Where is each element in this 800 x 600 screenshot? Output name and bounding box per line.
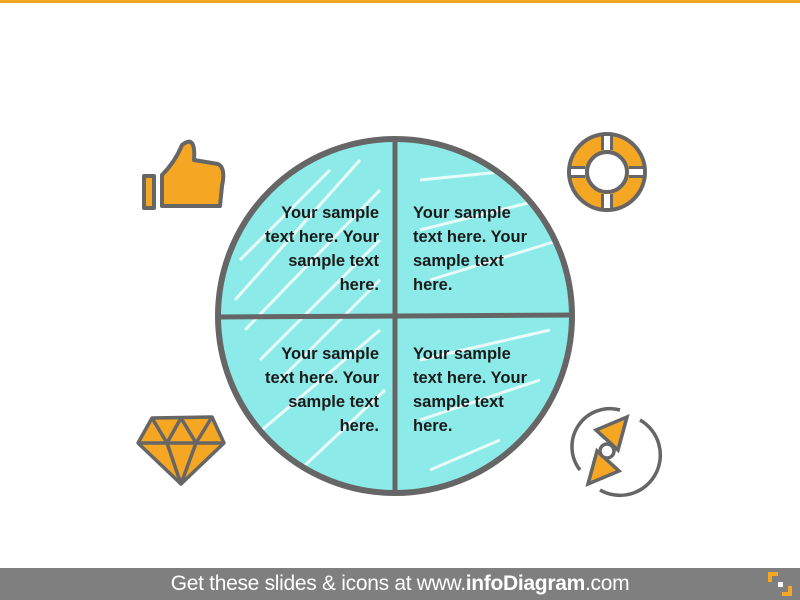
icon: diamond — [138, 417, 224, 484]
text: top-left quadrant: Your sample text here. Your sample text here. — [265, 204, 379, 294]
footer logo — [768, 572, 792, 596]
icon: compass — [572, 409, 660, 495]
quadrant circle — [216, 138, 574, 494]
icon: lifebuoy — [569, 134, 645, 210]
text: top-right quadrant: Your sample text here. Your sample text here. — [413, 204, 527, 294]
text: bottom-left quadrant: Your sample text here. Your sample text here. — [265, 345, 379, 435]
text: bottom-right quadrant: Your sample text here. Your sample text here. — [413, 345, 527, 435]
icon: thumbs up — [144, 142, 223, 208]
footer bar: Get these slides & icons at www.infoDiagram.com — [171, 572, 629, 595]
footer bar — [0, 568, 800, 600]
top accent line — [0, 0, 800, 3]
